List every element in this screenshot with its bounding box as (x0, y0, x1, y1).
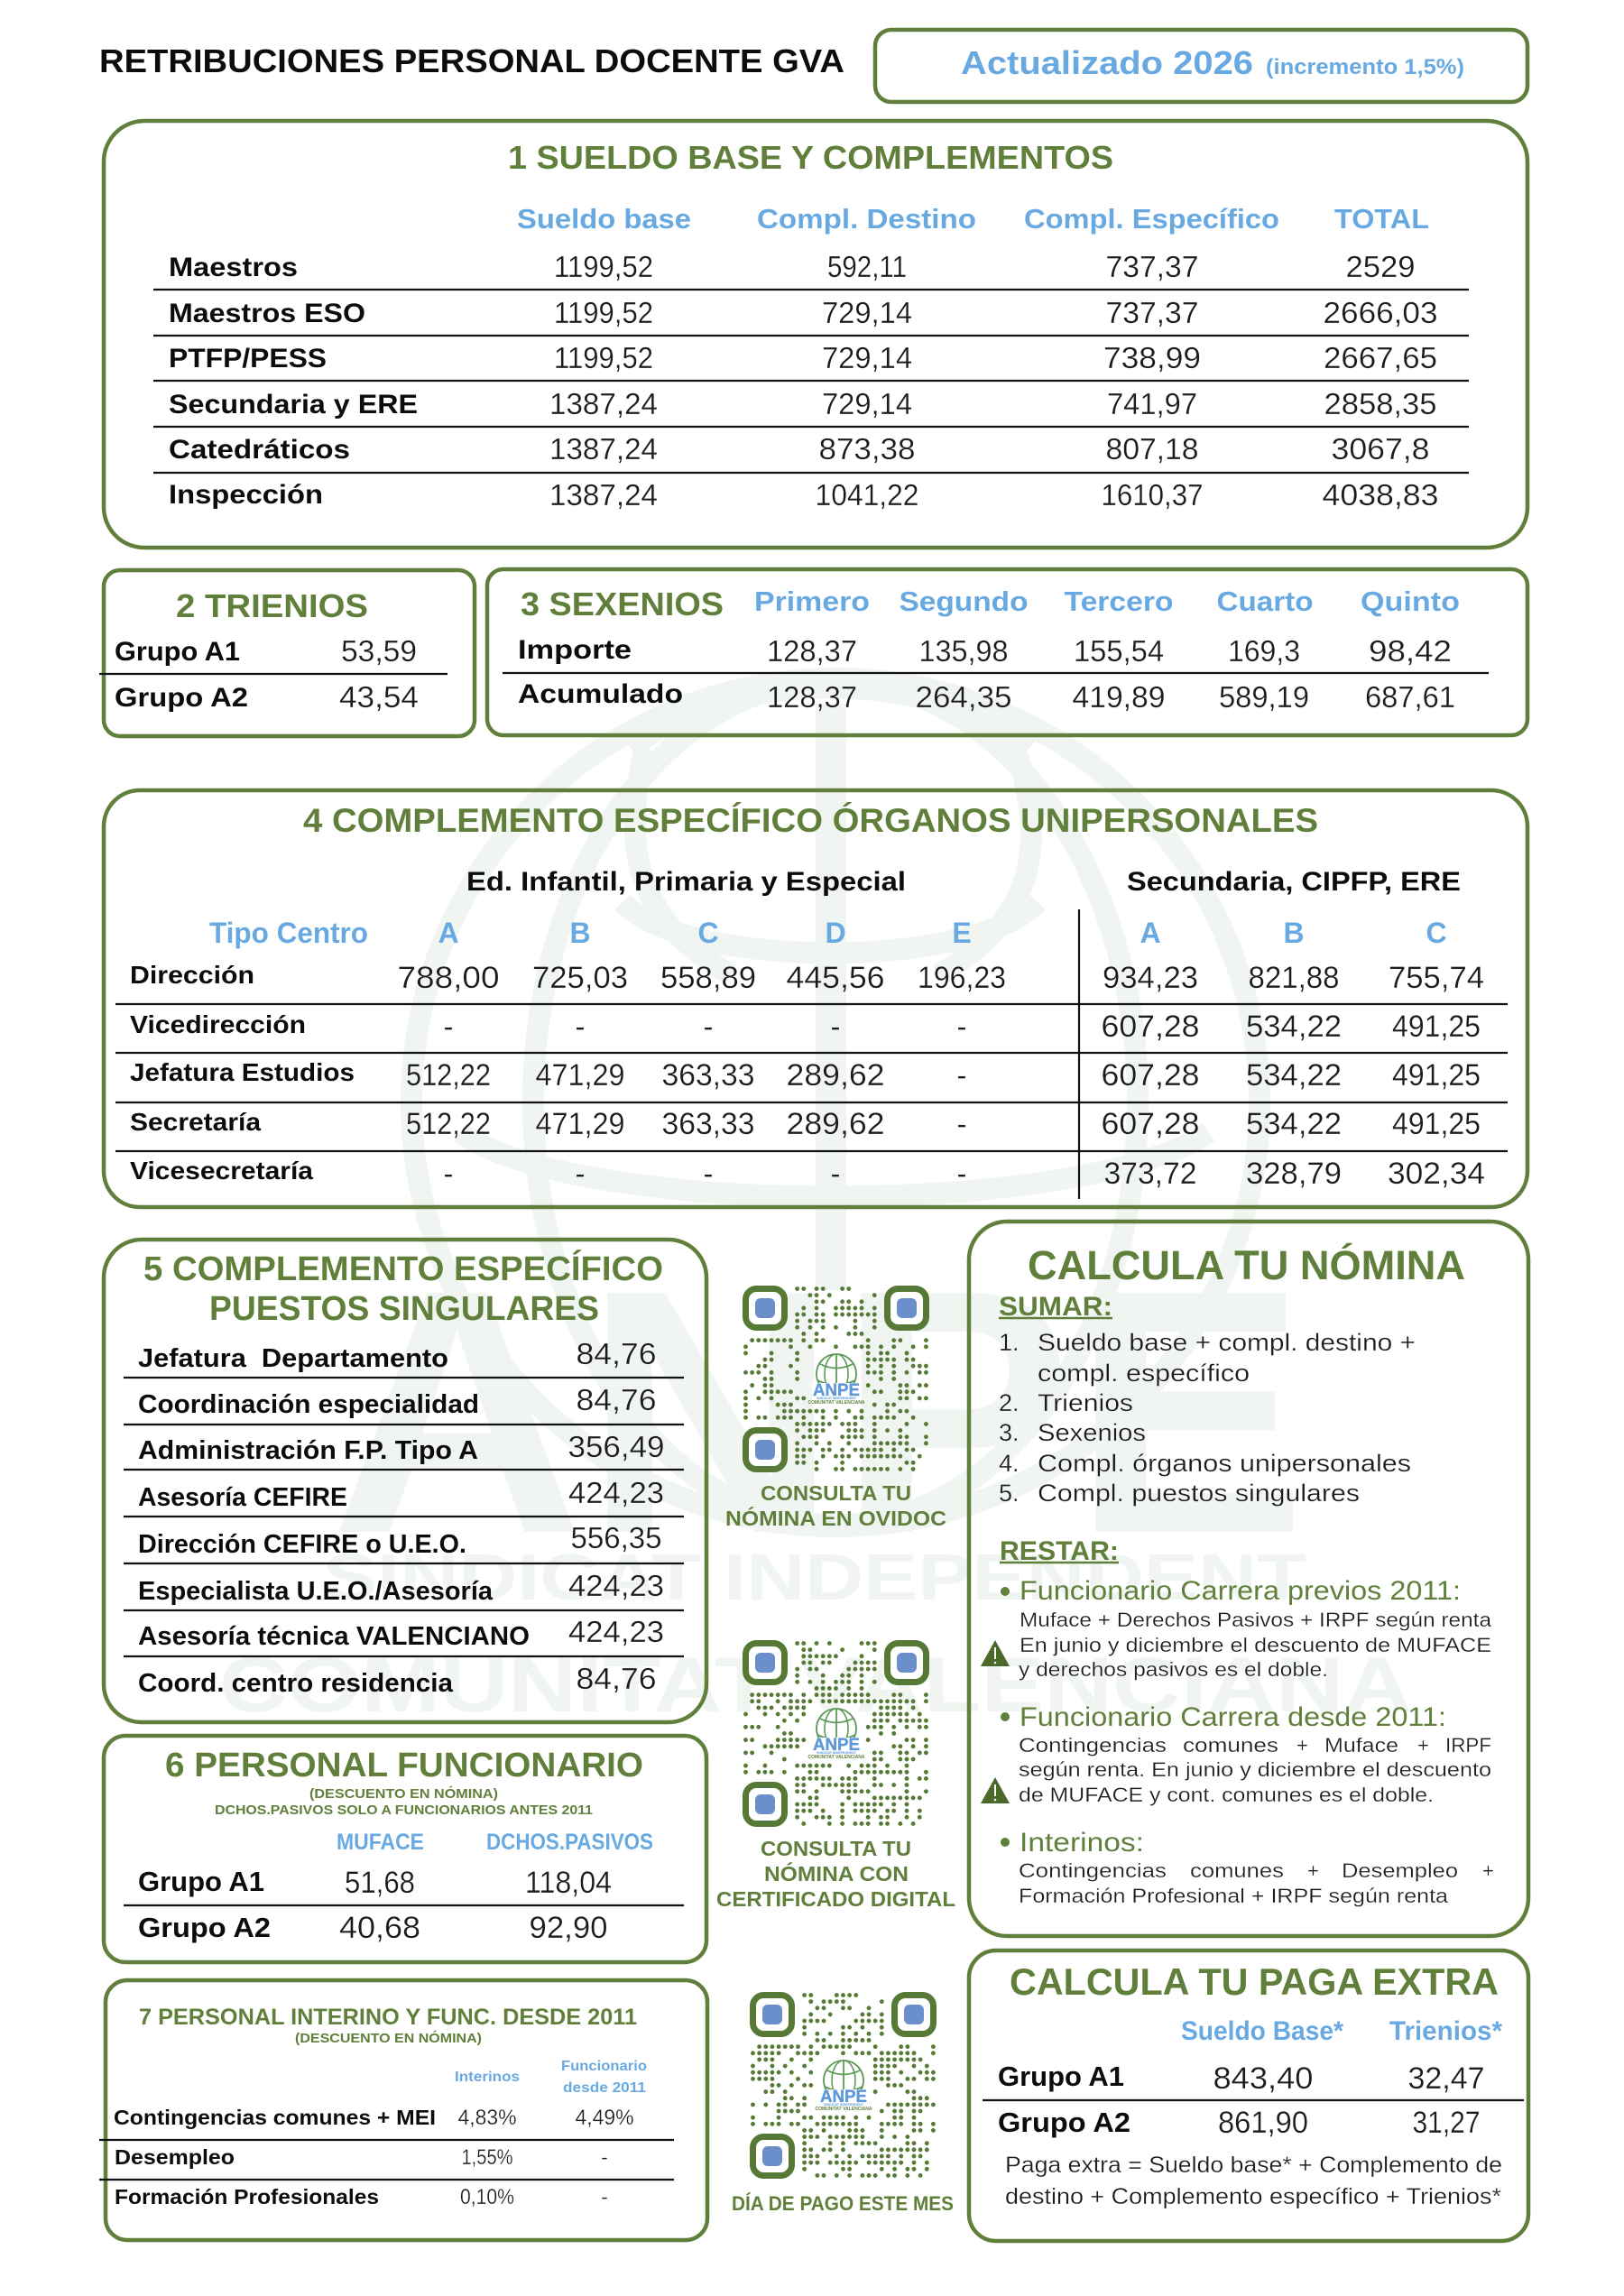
panel: 1 sueldo base y complementos: 1199,52 (554, 296, 653, 329)
panel: 7 personal interino y func. desde 2011: 4,49% (576, 2106, 633, 2130)
panel: 1 sueldo base y complementos: Maestros (169, 253, 298, 282)
panel: 7 personal interino y func. desde 2011: (DESCUENTO EN NÓMINA) (295, 2030, 482, 2046)
panel: 1 sueldo base y complementos: 1199,52 (554, 341, 653, 374)
panel: calcula tu nómina: + (1307, 1859, 1319, 1882)
panel: 4 complemento especifico organos unipersonales: Ed. Infantil, Primaria y Especial (466, 867, 906, 897)
panel: 1 sueldo base y complementos: 2529 (1346, 250, 1415, 283)
panel: 5 complemento especifico puestos singulares: 556,35 (570, 1521, 662, 1554)
QR caption: certificado digital: CERTIFICADO DIGITAL (716, 1887, 955, 1911)
panel: 4 complemento especifico organos unipersonales: - (956, 1010, 967, 1043)
panel: calcula tu nómina: RESTAR: (1000, 1536, 1119, 1566)
panel: calcula tu nómina: 3. (999, 1419, 1020, 1446)
panel: 1 sueldo base y complementos: 3067,8 (1332, 432, 1429, 466)
panel: 4 complemento especifico organos unipersonales: Vicesecretaría (130, 1157, 313, 1185)
panel: calcula tu nómina: 5. (999, 1480, 1020, 1507)
panel: 3 sexenios: 419,89 (1072, 680, 1166, 714)
panel: 5 complemento especifico puestos singulares: 424,23 (568, 1569, 664, 1602)
watermark: ANPE logo: ANPE (330, 1217, 1306, 1606)
panel: 2 trienios: Grupo A1 (115, 637, 240, 667)
panel: 6 personal funcionario: 40,68 (339, 1911, 420, 1945)
panel: 4 complemento especifico organos unipersonales: 534,22 (1246, 1058, 1342, 1093)
panel: 1 sueldo base y complementos: 729,14 (822, 341, 912, 374)
QR caption: Ovidoc (725, 1481, 946, 1530)
panel: 5 complemento especifico puestos singulares: 5 COMPLEMENTO ESPECÍFICO (143, 1249, 663, 1288)
panel: 4 complemento especifico organos unipersonales: D (825, 917, 846, 949)
panel: 6 personal funcionario: MUFACE (337, 1830, 424, 1855)
panel: calcula tu nómina: Desempleo (1342, 1859, 1458, 1882)
QR code: día de pago: COMUNITAT VALENCIANA (816, 2107, 872, 2112)
panel: calcula tu nómina (969, 1222, 1528, 1936)
QR code: consulta nómina con certificado digital: COMUNITAT VALENCIANA (808, 1755, 865, 1760)
panel: 1 sueldo base y complementos: Inspección (169, 480, 323, 510)
panel: 3 sexenios: Acumulado (518, 679, 683, 709)
QR caption: día de pago: DÍA DE PAGO ESTE MES (732, 2192, 954, 2215)
panel: 1 sueldo base y complementos: 1387,24 (549, 387, 658, 420)
panel: 6 personal funcionario: Grupo A2 (138, 1912, 271, 1943)
panel: 5 complemento especifico puestos singulares: 424,23 (568, 1615, 664, 1648)
panel: 4 complemento especifico organos unipersonales: 607,28 (1101, 1107, 1200, 1141)
update badge: Actualizado 2026 (961, 44, 1253, 81)
panel: 4 complemento especifico organos unipersonales: 302,34 (1388, 1157, 1485, 1191)
panel: 1 sueldo base y complementos: 738,99 (1103, 341, 1201, 374)
panel: calcula tu paga extra: Trienios* (1389, 2016, 1502, 2046)
panel: 4 complemento especifico organos unipersonales: Dirección (130, 961, 254, 989)
panel: calcula tu nómina: En junio y diciembre el descuento de MUFACE (1020, 1634, 1491, 1656)
panel: 4 complemento especifico organos unipersonales: 934,23 (1103, 961, 1198, 995)
QR caption: Ovidoc: CONSULTA TU (761, 1481, 911, 1505)
panel: 4 complemento especifico organos unipersonales: 788,00 (397, 961, 500, 995)
QR code: día de pago: ANPE (820, 2088, 867, 2107)
panel: calcula tu nómina: SUMAR: (999, 1292, 1112, 1322)
panel: 4 complemento especifico organos unipersonales: 471,29 (536, 1107, 624, 1141)
panel: 1 sueldo base y complementos: Catedráticos (169, 435, 350, 465)
panel: 7 personal interino y func. desde 2011: - (601, 2185, 608, 2208)
update badge (875, 30, 1527, 102)
panel: calcula tu nómina: según renta. En junio y diciembre el descuento (1019, 1758, 1491, 1781)
panel: calcula tu nómina: 4. (999, 1450, 1020, 1477)
panel: 3 sexenios: 135,98 (918, 634, 1009, 668)
panel: calcula tu nómina: CALCULA TU NÓMINA (1028, 1242, 1465, 1288)
panel: calcula tu nómina: Muface + Derechos Pasivos + IRPF según renta (1020, 1609, 1492, 1631)
panel: calcula tu nómina: Contingencias (1019, 1859, 1167, 1882)
panel: 3 sexenios: Tercero (1065, 586, 1173, 617)
panel: 1 sueldo base y complementos: 737,37 (1106, 296, 1198, 329)
watermark: ANPE logo: COMUNITAT VALENCIANA (219, 1642, 1412, 1729)
panel: 6 personal funcionario (104, 1736, 706, 1962)
panel: calcula tu nómina: y derechos pasivos es el doble. (1019, 1658, 1328, 1681)
panel: 3 sexenios: 169,3 (1228, 634, 1300, 668)
panel: 4 complemento especifico organos unipersonales: 289,62 (787, 1058, 884, 1093)
panel: 5 complemento especifico puestos singulares: Coord. centro residencia (138, 1669, 454, 1698)
panel: 6 personal funcionario: Grupo A1 (138, 1866, 264, 1897)
panel: 1 sueldo base y complementos: PTFP/PESS (169, 344, 327, 373)
panel: calcula tu nómina: Funcionario Carrera previos 2011: (1020, 1576, 1461, 1606)
panel: 4 complemento especifico organos unipersonales: A (1140, 917, 1161, 949)
panel: 4 complemento especifico organos unipersonales: 534,22 (1246, 1010, 1342, 1044)
panel: calcula tu paga extra: Paga extra = Sueldo base* + Complemento de (1005, 2153, 1502, 2178)
panel: calcula tu nómina: Sexenios (1038, 1419, 1146, 1446)
panel: calcula tu nómina: + (1296, 1734, 1308, 1757)
panel: calcula tu paga extra: Grupo A1 (998, 2061, 1124, 2092)
panel: 4 complemento especifico organos unipersonales: Tipo Centro (209, 917, 368, 949)
panel: 3 sexenios: 128,37 (767, 634, 857, 668)
panel: calcula tu paga extra: 32,47 (1407, 2061, 1485, 2096)
panel: 4 complemento especifico organos unipersonales: - (576, 1010, 585, 1043)
panel: 7 personal interino y func. desde 2011: Interinos (455, 2070, 520, 2085)
panel: 1 sueldo base y complementos: 1387,24 (549, 432, 658, 466)
panel: 4 complemento especifico organos unipersonales: 363,33 (662, 1058, 754, 1093)
panel: 1 sueldo base y complementos: 592,11 (827, 250, 907, 283)
panel: 3 sexenios: Importe (518, 635, 632, 665)
panel: 4 complemento especifico organos unipersonales: Secundaria, CIPFP, ERE (1127, 867, 1461, 897)
update badge: (incremento 1,5%) (1266, 55, 1464, 79)
panel: calcula tu paga extra: Grupo A2 (998, 2107, 1130, 2138)
panel: 4 complemento especifico organos unipersonales: 491,25 (1392, 1107, 1481, 1141)
panel: calcula tu paga extra: CALCULA TU PAGA EXTRA (1010, 1960, 1499, 2003)
panel: 5 complemento especifico puestos singulares: Administración F.P. Tipo A (138, 1436, 478, 1465)
panel: 7 personal interino y func. desde 2011: Desempleo (115, 2145, 235, 2169)
panel: 4 complemento especifico organos unipersonales: 607,28 (1101, 1010, 1200, 1044)
QR caption: certificado digital: CONSULTA TU (761, 1837, 911, 1860)
panel: 4 complemento especifico organos unipersonales: - (704, 1157, 713, 1190)
panel: 6 personal funcionario: 51,68 (345, 1866, 415, 1900)
panel: 6 personal funcionario: DCHOS.PASIVOS (486, 1830, 653, 1855)
panel: 4 complemento especifico organos unipersonales: C (1426, 917, 1447, 949)
panel: 1 sueldo base y complementos: Compl. Destino (757, 203, 976, 235)
panel: 4 complemento especifico organos unipersonales: 755,74 (1389, 961, 1484, 995)
QR code: consulta nómina con certificado digital: ANPE (813, 1736, 860, 1755)
panel: 4 complemento especifico organos unipersonales: - (830, 1157, 841, 1190)
panel: 1 sueldo base y complementos: 2858,35 (1324, 387, 1436, 420)
panel: 5 complemento especifico puestos singulares: Jefatura Departamento (138, 1344, 448, 1373)
panel: calcula tu nómina: Compl. puestos singulares (1038, 1480, 1360, 1507)
panel: 2 trienios (99, 570, 475, 736)
panel: 4 complemento especifico organos unipersonales: 491,25 (1392, 1058, 1481, 1093)
panel: 1 sueldo base y complementos: 2666,03 (1323, 296, 1438, 329)
panel: 4 complemento especifico organos unipersonales: E (952, 917, 972, 949)
panel: 1 sueldo base y complementos: 873,38 (819, 432, 915, 466)
panel: 1 sueldo base y complementos: TOTAL (1334, 203, 1429, 235)
QR caption: certificado digital (716, 1837, 955, 1911)
panel: 1 sueldo base y complementos: 2667,65 (1324, 341, 1437, 374)
panel: 4 complemento especifico organos unipersonales (104, 790, 1527, 1207)
panel: 5 complemento especifico puestos singulares: Dirección CEFIRE o U.E.O. (138, 1530, 466, 1559)
panel: 4 complemento especifico organos unipersonales: C (697, 917, 719, 949)
icon: warning triangle (981, 1777, 1010, 1803)
panel: 4 complemento especifico organos unipersonales: Vicedirección (130, 1010, 306, 1038)
panel: 5 complemento especifico puestos singulares: Especialista U.E.O./Asesoría (138, 1577, 494, 1606)
panel: 3 sexenios: Cuarto (1216, 586, 1314, 617)
panel: 7 personal interino y func. desde 2011: Contingencias comunes + MEI (114, 2106, 436, 2129)
QR caption: Ovidoc: NÓMINA EN OVIDOC (725, 1506, 946, 1530)
panel: calcula tu nómina: compl. específico (1038, 1360, 1250, 1387)
QR code: consulta nómina con certificado digital: SINDICAT INDEPENDENT (817, 1750, 857, 1755)
QR code: consulta nómina con certificado digital (745, 1644, 926, 1824)
panel: 1 sueldo base y complementos: 1041,22 (816, 478, 918, 512)
panel: 7 personal interino y func. desde 2011 (99, 1980, 707, 2240)
panel: calcula tu nómina: Contingencias (1019, 1734, 1167, 1757)
panel: 3 sexenios: 264,35 (915, 680, 1012, 714)
panel: 4 complemento especifico organos unipersonales: - (830, 1010, 841, 1043)
panel: 4 complemento especifico organos unipersonales: 373,72 (1104, 1157, 1196, 1191)
panel: 4 complemento especifico organos unipersonales: - (444, 1157, 453, 1190)
panel: 4 complemento especifico organos unipersonales: - (956, 1058, 967, 1092)
panel: 5 complemento especifico puestos singulares: PUESTOS SINGULARES (209, 1290, 599, 1328)
panel: 2 trienios: Grupo A2 (115, 683, 248, 713)
panel: 4 complemento especifico organos unipersonales: Secretaría (130, 1108, 261, 1136)
panel: 4 complemento especifico organos unipersonales: 512,22 (406, 1058, 491, 1093)
watermark: ANPE logo: SINDICAT INDEPENDENT (323, 1542, 1306, 1614)
panel: 3 sexenios: 155,54 (1074, 634, 1164, 668)
panel: 7 personal interino y func. desde 2011: Funcionario (561, 2059, 647, 2074)
watermark: ANPE logo (219, 678, 1412, 1729)
panel: 4 complemento especifico organos unipersonales: 4 COMPLEMENTO ESPECÍFICO ÓRGANOS UNIPERSONALES (303, 801, 1318, 839)
panel: 4 complemento especifico organos unipersonales: 725,03 (532, 961, 628, 995)
QR code: consulta nómina Ovidoc: ANPE (813, 1381, 860, 1400)
panel: 4 complemento especifico organos unipersonales: B (569, 917, 591, 949)
panel: calcula tu nómina: Formación Profesional + IRPF según renta (1019, 1885, 1449, 1907)
panel: 5 complemento especifico puestos singulares: 424,23 (568, 1476, 664, 1509)
panel: 5 complemento especifico puestos singulares: 84,76 (576, 1383, 657, 1416)
panel: 1 sueldo base y complementos: 729,14 (822, 387, 912, 420)
panel: 3 sexenios: 128,37 (767, 680, 857, 714)
panel: 6 personal funcionario: DCHOS.PASIVOS SOLO A FUNCIONARIOS ANTES 2011 (215, 1803, 593, 1818)
panel: 3 sexenios: 3 SEXENIOS (521, 586, 724, 622)
panel: 6 personal funcionario: (DESCUENTO EN NÓMINA) (309, 1785, 498, 1802)
panel: calcula tu nómina: 2. (999, 1389, 1020, 1416)
panel: calcula tu paga extra: 843,40 (1213, 2061, 1314, 2096)
panel: calcula tu nómina: Interinos: (1020, 1828, 1144, 1858)
panel: calcula tu nómina: comunes (1183, 1734, 1278, 1757)
panel: 4 complemento especifico organos unipersonales: - (704, 1010, 713, 1043)
QR code: día de pago (752, 1996, 933, 2176)
panel: 2 trienios: 2 TRIENIOS (176, 587, 368, 624)
panel: 4 complemento especifico organos unipersonales: 363,33 (662, 1107, 754, 1141)
panel: calcula tu paga extra (969, 1950, 1528, 2241)
panel: calcula tu nómina: Sueldo base + compl. destino + (1038, 1329, 1416, 1356)
panel: 4 complemento especifico organos unipersonales: A (438, 917, 459, 949)
panel: 4 complemento especifico organos unipersonales: 328,79 (1246, 1157, 1342, 1191)
title: RETRIBUCIONES PERSONAL DOCENTE GVA (99, 42, 844, 79)
panel: 5 complemento especifico puestos singulares: 356,49 (568, 1430, 664, 1463)
panel: 4 complemento especifico organos unipersonales: 558,89 (660, 961, 756, 995)
panel: 7 personal interino y func. desde 2011: 4,83% (458, 2106, 516, 2130)
panel: calcula tu nómina: + (1417, 1734, 1429, 1757)
panel: 4 complemento especifico organos unipersonales: Jefatura Estudios (130, 1058, 355, 1086)
panel: 6 personal funcionario: 92,90 (529, 1911, 608, 1945)
panel: calcula tu nómina: Funcionario Carrera desde 2011: (1020, 1702, 1446, 1732)
panel: calcula tu nómina: Compl. órganos unipersonales (1038, 1450, 1411, 1477)
panel: calcula tu nómina: comunes (1190, 1859, 1284, 1882)
panel: 5 complemento especifico puestos singulares (104, 1240, 706, 1722)
panel: calcula tu paga extra: 31,27 (1413, 2106, 1480, 2140)
QR caption: certificado digital: NÓMINA CON (764, 1861, 909, 1886)
panel: 3 sexenios: Primero (754, 586, 870, 617)
QR code: consulta nómina Ovidoc (745, 1288, 926, 1469)
panel: 4 complemento especifico organos unipersonales: 821,88 (1249, 961, 1339, 995)
panel: 1 sueldo base y complementos: 729,14 (822, 296, 912, 329)
panel: 7 personal interino y func. desde 2011: 0,10% (460, 2185, 514, 2209)
panel: 4 complemento especifico organos unipersonales: B (1283, 917, 1305, 949)
panel: 7 personal interino y func. desde 2011: 7 PERSONAL INTERINO Y FUNC. DESDE 2011 (139, 2005, 637, 2030)
panel: 4 complemento especifico organos unipersonales: 607,28 (1101, 1058, 1200, 1093)
panel: 2 trienios: 53,59 (341, 634, 417, 668)
panel: 3 sexenios: 98,42 (1369, 634, 1452, 668)
panel: calcula tu nómina: Trienios (1038, 1389, 1133, 1416)
panel: 4 complemento especifico organos unipersonales: 491,25 (1392, 1010, 1481, 1044)
panel: 1 sueldo base y complementos: 1199,52 (554, 250, 653, 283)
panel: 7 personal interino y func. desde 2011: desde 2011 (563, 2080, 646, 2096)
panel: 1 sueldo base y complementos: 807,18 (1106, 432, 1198, 466)
panel: 5 complemento especifico puestos singulares: 84,76 (576, 1337, 657, 1370)
panel: 3 sexenios (487, 569, 1527, 735)
panel: 4 complemento especifico organos unipersonales: - (444, 1010, 453, 1043)
panel: 1 sueldo base y complementos (104, 121, 1527, 548)
panel: 1 sueldo base y complementos: 741,97 (1107, 387, 1197, 420)
panel: 4 complemento especifico organos unipersonales: - (956, 1157, 967, 1190)
panel: 7 personal interino y func. desde 2011: 1,55% (462, 2145, 512, 2170)
panel: 7 personal interino y func. desde 2011: Formación Profesionales (115, 2185, 379, 2208)
panel: calcula tu paga extra: 861,90 (1218, 2106, 1308, 2140)
panel: 4 complemento especifico organos unipersonales: 289,62 (787, 1107, 884, 1141)
panel: 3 sexenios: 687,61 (1365, 680, 1455, 714)
QR code: día de pago: SINDICAT INDEPENDENT (824, 2102, 864, 2107)
panel: 5 complemento especifico puestos singulares: Asesoría CEFIRE (138, 1483, 347, 1512)
panel: calcula tu nómina: IRPF (1445, 1734, 1491, 1757)
panel: 4 complemento especifico organos unipersonales: - (576, 1157, 585, 1190)
panel: calcula tu paga extra: Sueldo Base* (1181, 2016, 1343, 2046)
panel: 4 complemento especifico organos unipersonales: 512,22 (406, 1107, 491, 1141)
panel: calcula tu nómina: de MUFACE y cont. comunes es el doble. (1019, 1784, 1434, 1806)
panel: 1 sueldo base y complementos: 1387,24 (549, 478, 658, 512)
panel: 4 complemento especifico organos unipersonales: 471,29 (536, 1058, 624, 1093)
panel: calcula tu nómina: Muface (1324, 1734, 1398, 1757)
panel: 5 complemento especifico puestos singulares: Asesoría técnica VALENCIANO (138, 1622, 530, 1651)
panel: 5 complemento especifico puestos singulares: Coordinación especialidad (138, 1390, 479, 1419)
QR code: consulta nómina Ovidoc: COMUNITAT VALENCIANA (808, 1400, 865, 1406)
QR code: consulta nómina Ovidoc: SINDICAT INDEPENDENT (817, 1396, 857, 1400)
panel: 1 sueldo base y complementos: 737,37 (1106, 250, 1198, 283)
panel: 5 complemento especifico puestos singulares: 84,76 (576, 1662, 657, 1695)
panel: 1 sueldo base y complementos: Maestros ESO (169, 299, 365, 328)
panel: 2 trienios: 43,54 (339, 680, 419, 714)
panel: calcula tu nómina: 1. (999, 1329, 1020, 1356)
panel: 1 sueldo base y complementos: 1610,37 (1101, 478, 1204, 512)
panel: 3 sexenios: Quinto (1361, 586, 1460, 617)
panel: calcula tu paga extra: destino + Complemento específico + Trienios* (1005, 2184, 1501, 2209)
panel: 7 personal interino y func. desde 2011: - (601, 2145, 608, 2169)
panel: 6 personal funcionario: 118,04 (525, 1866, 612, 1900)
panel: 3 sexenios: Segundo (899, 586, 1029, 617)
panel: 1 sueldo base y complementos: Secundaria y ERE (169, 390, 418, 420)
panel: 1 sueldo base y complementos: 4038,83 (1323, 478, 1438, 512)
panel: 4 complemento especifico organos unipersonales: - (956, 1107, 967, 1140)
panel: 4 complemento especifico organos unipersonales: 534,22 (1246, 1107, 1342, 1141)
panel: 1 sueldo base y complementos: Sueldo base (517, 203, 691, 235)
panel: 3 sexenios: 589,19 (1219, 680, 1309, 714)
panel: calcula tu nómina: + (1482, 1859, 1494, 1882)
panel: 4 complemento especifico organos unipersonales: 196,23 (918, 961, 1006, 995)
panel: 4 complemento especifico organos unipersonales: 445,56 (787, 961, 884, 995)
panel: 6 personal funcionario: 6 PERSONAL FUNCIONARIO (165, 1747, 643, 1784)
icon: warning triangle (981, 1640, 1010, 1666)
panel: 1 sueldo base y complementos: Compl. Específico (1024, 203, 1279, 235)
panel: 1 sueldo base y complementos: 1 SUELDO BASE Y COMPLEMENTOS (508, 139, 1113, 176)
